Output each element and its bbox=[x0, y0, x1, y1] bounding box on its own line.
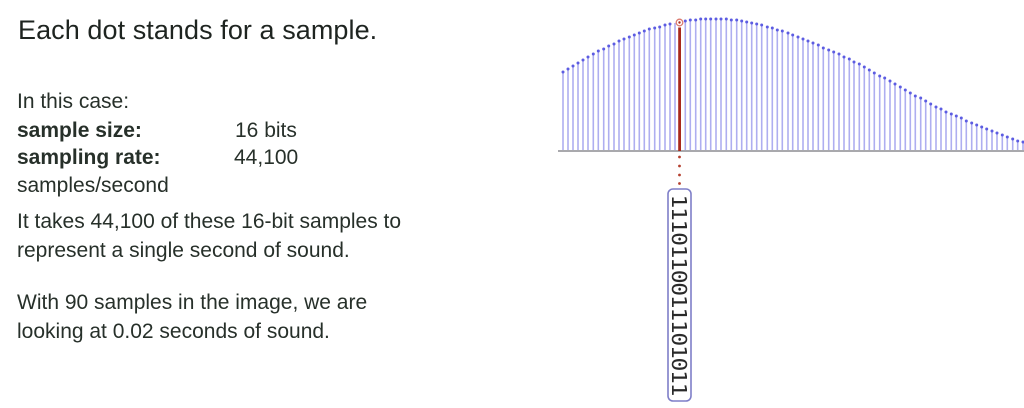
text: samples per second explanation: It takes 44,100 of these 16-bit samples to bbox=[17, 210, 401, 233]
text: samples per second explanation bbox=[17, 210, 401, 262]
text: image duration: looking at 0.02 seconds of sound. bbox=[17, 320, 330, 343]
axis baseline bbox=[558, 150, 1024, 152]
text: image duration: With 90 samples in the image, we are bbox=[17, 291, 367, 314]
text: samples per second explanation: represent a single second of sound. bbox=[17, 239, 350, 262]
text: image duration bbox=[17, 291, 367, 343]
binary sample box bbox=[666, 189, 691, 401]
dotted connector bbox=[678, 156, 681, 185]
text: sampling rate bbox=[17, 146, 298, 169]
text: sampling rate: sampling rate: bbox=[17, 146, 161, 169]
binary value: 1110110011101011 bbox=[666, 194, 690, 396]
text: sample size: sample size: bbox=[17, 119, 142, 142]
sample dots bbox=[562, 18, 1024, 144]
text: sample size bbox=[17, 119, 297, 142]
title: Each dot stands for a sample. bbox=[18, 15, 377, 45]
text: sampling rate: 44,100 bbox=[234, 146, 298, 169]
text: samples per second: samples/second bbox=[17, 174, 169, 197]
highlighted sample marker bbox=[676, 19, 683, 26]
highlighted sample stem bbox=[678, 28, 681, 151]
text: in this case: In this case: bbox=[17, 90, 129, 113]
text: sample size: 16 bits bbox=[235, 119, 297, 142]
